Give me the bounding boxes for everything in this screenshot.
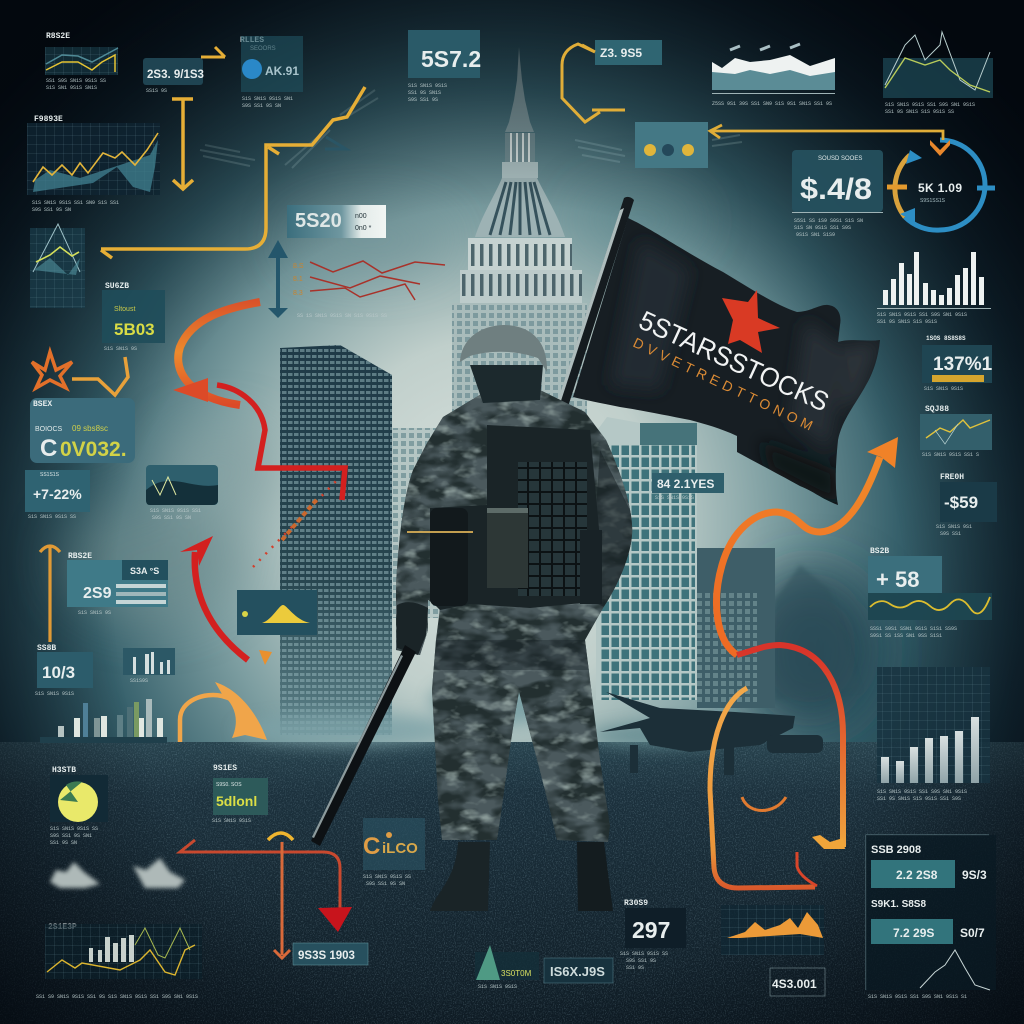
ground (0, 742, 1024, 1024)
panel: 84 label (652, 473, 724, 501)
chart: orange area (721, 905, 824, 955)
logo: C1LCO: C (363, 833, 380, 860)
mist at horizon (235, 675, 730, 747)
panel: bottom right table: 9S/3 (962, 868, 987, 882)
chart: right bars: S1S SN1S 9S1S SS1 S9S SN1 9S1S (877, 789, 967, 795)
panel: pie (50, 766, 108, 846)
arrow: orange S-curve (717, 437, 898, 655)
panel: bottom right value (770, 968, 825, 996)
arrow: small orange tip (259, 650, 272, 665)
panel: green triangle (475, 945, 539, 990)
chart: left upper area: S1S SN1S 9S1S SS1 SN9 S1S SS1 (32, 200, 119, 206)
panel: GO0O2: BSEX (33, 400, 52, 409)
panel: 5Bt0nl (212, 764, 268, 824)
panel: globe (240, 36, 303, 109)
arrow: orange arc (180, 682, 267, 742)
arrow: blue double vertical (268, 240, 288, 318)
ground texture (0, 742, 1024, 1024)
far right building (697, 548, 775, 708)
panel: mid-left values (67, 552, 168, 616)
panel: bottom value right: IS6X.J9S (550, 964, 605, 979)
panel: globe: S1S SN1S 9S1S SN1 (242, 96, 293, 102)
flag name: 5STARSSTOCKS (635, 305, 833, 417)
panel: $.47/8 (792, 150, 883, 238)
panel: GO0O2: 0V032. (60, 438, 127, 461)
panel: 10/3: S1S SN1S 9S1S (35, 691, 74, 697)
panel: -$59: S1S SN1S 9S1 (936, 524, 972, 530)
panel: +52 wave: S9S1 SS 1SS SN1 9SS S1S1 (870, 633, 942, 639)
left skyscraper (280, 345, 392, 735)
chalk streaks (200, 90, 742, 168)
aircraft silhouette (600, 692, 823, 775)
chart: right line: SQJ88 (925, 405, 949, 414)
panel: landscape: S1S SN1S 9S1S SS1 (150, 508, 201, 514)
panel: -$59 (936, 473, 997, 537)
chart: bottom-left (36, 923, 202, 1000)
rifle staff (311, 645, 416, 846)
chart: red lines (293, 261, 445, 300)
icon: dark chevron (325, 137, 346, 149)
panel: bottom right table: 2.2 2S8 (896, 868, 938, 882)
dotted trend line (253, 477, 340, 567)
panel: bottom value right (544, 958, 613, 983)
logo: C1LCO: S1S SN1S 9S1S SS (363, 874, 411, 880)
panel: bottom value (293, 943, 368, 965)
logo: C1LCO: iLCO (382, 840, 418, 857)
panel: +52 wave: + 58 (876, 567, 919, 592)
panel: 5S20: n00 (355, 213, 367, 220)
chart: left upper area: S9S SS1 9S SN (32, 207, 71, 213)
chart: red lines: 8.S (293, 263, 304, 270)
panel: GO0O2: BOIOCS (35, 426, 63, 433)
panel: pie: S1S SN1S 9S1S SS (50, 826, 98, 832)
panel: top-left line chart (45, 32, 118, 91)
panel: bottom value: 9S3S 1903 (298, 950, 355, 962)
panel: GO0O2: 09 sbs8sc (72, 424, 108, 433)
logo: C1LCO (363, 818, 425, 887)
arrow: red-orange bend (737, 645, 845, 849)
panel: bottom right table: 7.2 29S (893, 926, 934, 940)
panel: 29.7: S1S SN1S 9S1S SS (620, 951, 668, 957)
panel: +52 wave (868, 547, 992, 639)
panel: mid-left values: S1S SN1S 9S (78, 610, 111, 616)
uniform (390, 385, 640, 855)
panel: coin icons (635, 122, 708, 168)
chart: left upper area (27, 115, 160, 213)
chart: top right peaks: SS1 9S SN1S S1S 9S1S SS (885, 109, 954, 115)
chart: bottom-left: SS1 S9 SN1S 9S1S SS1 9S S1S SN1S 9S1S SS1 S9S SN1 9S1S (36, 994, 198, 1000)
chart: left small (30, 224, 85, 308)
panel: 5B03 (102, 282, 165, 352)
panel: $.47/8: 9S1S SN1 S1S9 (796, 232, 835, 238)
chart: top area white (712, 44, 835, 107)
panel: 5B03: SU6ZB (105, 282, 129, 291)
spire (505, 47, 534, 132)
panel: big number top: S9S SS1 9S (408, 97, 438, 103)
panel: globe: SEOORS (250, 46, 276, 52)
panel: value top: SS1S 9S (146, 88, 167, 94)
panel: 84 label: S1S SN1S 9S1S (655, 495, 694, 501)
panel: 10/3: SS8B (37, 644, 56, 653)
panel: $.47/8: SOUSD SOOES (818, 156, 862, 162)
arrow: small yellow top (201, 47, 225, 57)
panel: green triangle: 3S0T0M (501, 969, 532, 978)
panel: 137%: S1S SN1S 9S1S (924, 386, 963, 392)
panel: value top: 2S3. 9/1S3 (147, 69, 204, 81)
panel: 5Bt0nl: 5dlonl (216, 793, 257, 809)
flag pole (553, 197, 634, 416)
arrow: red cross (180, 833, 352, 958)
panel: GO0O2: C (40, 435, 57, 462)
panel: 29.7: S9S SS1 9S (626, 958, 656, 964)
arrow: orange bracket (710, 688, 817, 888)
chart: right line (920, 405, 992, 458)
panel: mid-left values: S3A °S (130, 566, 159, 576)
panel: $.47/8: $.4/8 (800, 173, 872, 206)
icon: ring: 5K 1.09 (918, 181, 962, 195)
arrow: red-orange curve left (173, 302, 260, 405)
panel: 29.7: R30S9 (624, 899, 648, 908)
chart: white bars right: S1S SN1S 9S1S SS1 S9S SN1 9S1S (877, 312, 967, 318)
chart: red lines: 8.1 (293, 276, 303, 283)
panel: bottom right table: S0/7 (960, 926, 985, 940)
panel: 5S20: 5S20 (295, 210, 342, 232)
vest and pouches (430, 425, 600, 610)
panel: percent left (25, 470, 90, 520)
arrow: long yellow (710, 125, 950, 156)
chart: left bars (40, 699, 167, 743)
flag subtitle: DVVETREDTTONOM (631, 334, 815, 434)
panel: 5B03: 5B03 (114, 320, 155, 339)
helmet (460, 325, 547, 372)
panel: landscape: S9S SS1 9S SN (152, 515, 191, 521)
head (470, 365, 543, 403)
chart: top right peaks: S1S SN1S 9S1S SS1 S9S SN1 9S1S (885, 102, 975, 108)
panel: landscape (146, 465, 218, 521)
panel: 137%: 1SOS 8S8S8S (926, 335, 966, 342)
dome (475, 178, 565, 237)
panel: 5Bt0nl: 9S1ES (213, 764, 237, 773)
panel: 84 label: 84 2.1YES (657, 477, 714, 491)
panel: 10/3: 10/3 (42, 663, 75, 682)
arrow: yellow vertical left (40, 546, 60, 642)
panel: percent left: S1S SN1S 9S1S SS (28, 514, 76, 520)
panel: -$59: -$59 (944, 493, 978, 512)
panel: pie: S9S SS1 9S SN1 (50, 833, 92, 839)
panel: bottom right table: S9K1. S8S8 (871, 899, 926, 910)
panel: green triangle: S1S SN1S 9S1S (478, 984, 517, 990)
hand (397, 602, 428, 655)
chart: bottom-left: 2S1E3P (48, 923, 77, 932)
panel: value top (143, 58, 204, 94)
clouds: dust (50, 858, 185, 888)
flag star (722, 290, 780, 353)
panel: 5B03: S1S SN1S 9S (104, 346, 137, 352)
panel: globe: RLLES (240, 36, 264, 45)
panel: yellow mountain (237, 590, 317, 635)
right building (596, 417, 697, 700)
arrow: yellow step (101, 87, 365, 258)
panel: top value: Z3. 9S5 (600, 46, 642, 60)
panel: top-left line chart: S1S SN1 9S1S SN1S (46, 85, 97, 91)
panel: bottom right table: S1S SN1S 9S1S SS1 S9S SN1 9S1S S1 (868, 994, 967, 1000)
panel: $.47/8: S5S1 SS 1S9 S0S1 S1S SN (794, 218, 863, 224)
boots (430, 842, 490, 911)
icon: ring (887, 140, 995, 230)
panel: mid-left values: RBS2E (68, 552, 92, 561)
panel: big number top: SS1 9S SN1S (408, 90, 441, 96)
panel: -$59: FRE0H (940, 473, 964, 482)
chart: left upper area: F9893E (34, 115, 63, 124)
panel: 5S20 (287, 205, 386, 238)
panel: bottom right value: 4S3.001 (772, 977, 817, 991)
clouds (60, 190, 880, 730)
logo: C1LCO: S9S SS1 9S SN (366, 881, 405, 887)
chart: white bars right (877, 252, 991, 325)
caption strip: SS 1S SN1S 9S1S SN S1S 9S1S SS (297, 313, 387, 319)
panel: top-left line chart: SS1 S9S SN1S 9S1S SS (46, 78, 106, 84)
soldier (390, 325, 640, 911)
panel: pie: H3STB (52, 766, 76, 775)
panel: big number top (408, 30, 481, 103)
arrow: red curve up (180, 536, 248, 660)
chart: small bars (123, 648, 175, 684)
chart: right line: S1S SN1S 9S1S SS1 S (922, 452, 979, 458)
chart: right bars (877, 667, 990, 802)
line: yellow strap (407, 531, 473, 533)
panel: bottom right table (866, 835, 996, 1000)
arrow: yellow bracket (562, 44, 625, 122)
panel: pie: SS1 9S SN (50, 840, 77, 846)
background building left mid (392, 428, 444, 618)
flag folds (610, 240, 880, 505)
arrow: yellow double vertical (172, 99, 193, 189)
panel: 29.7: SS1 9S (626, 965, 644, 971)
icon: ring: S9S1SS1S (920, 198, 946, 204)
panel: 137% (922, 335, 993, 392)
icon: orange star (32, 352, 72, 388)
mountain haze (775, 565, 860, 700)
panel: -$59: S9S SS1 (940, 531, 961, 537)
panel: 5Bt0nl: S9S0. SOS (216, 782, 242, 788)
panel: percent left: SS1S1S (40, 472, 60, 478)
capitol tower (452, 47, 587, 428)
chart: small bars: SS1S9S (130, 678, 148, 684)
flag (573, 218, 880, 505)
panel: big number top: S1S SN1S 9S1S (408, 83, 447, 89)
chart: right bars: SS1 9S SN1S S1S 9S1S SS1 S9S (877, 796, 961, 802)
panel: globe: S9S SS1 9S SN (242, 103, 281, 109)
panel: 5S20: 0n0 * (355, 225, 372, 232)
panel: 5Bt0nl: S1S SN1S 9S1S (212, 818, 251, 824)
panel: mid-left values: 2S9 (83, 585, 112, 602)
panel: top value (595, 40, 662, 65)
panel: +52 wave: SSS1 S9S1 SSN1 9S1S S1S1 SS9S (870, 626, 957, 632)
chart: top area white: Z5SS 9S1 39S SS1 SN9 S1S 9S1 SN1S SS1 9S (712, 101, 832, 107)
panel: percent left: +7-22% (33, 486, 82, 502)
panel: GO0O2 (30, 398, 135, 463)
panel: 5B03: Sltoust (114, 306, 135, 313)
chart: top right peaks (883, 32, 993, 115)
arrow: small yellow (72, 357, 128, 395)
chart: white bars right: SS1 9S SN1S S1S 9S1S (877, 319, 937, 325)
panel: top-left line chart: R8S2E (46, 32, 70, 41)
panel: 29.7 (620, 899, 686, 971)
panel: 137%: 137%1 (933, 354, 993, 375)
panel: bottom right table: SSB 2908 (871, 844, 921, 856)
panel: 10/3 (35, 644, 93, 697)
panel: 29.7: 297 (632, 917, 670, 943)
arrow: red step (217, 385, 345, 500)
panel: $.47/8: S1S SN 9S1S SS1 S9S (794, 225, 851, 231)
panel: big number top: 5S7.2 (421, 46, 481, 72)
chart: red lines: 8.3 (293, 290, 303, 297)
panel: globe: AK.91 (265, 64, 299, 78)
panel: +52 wave: BS2B (870, 547, 889, 556)
